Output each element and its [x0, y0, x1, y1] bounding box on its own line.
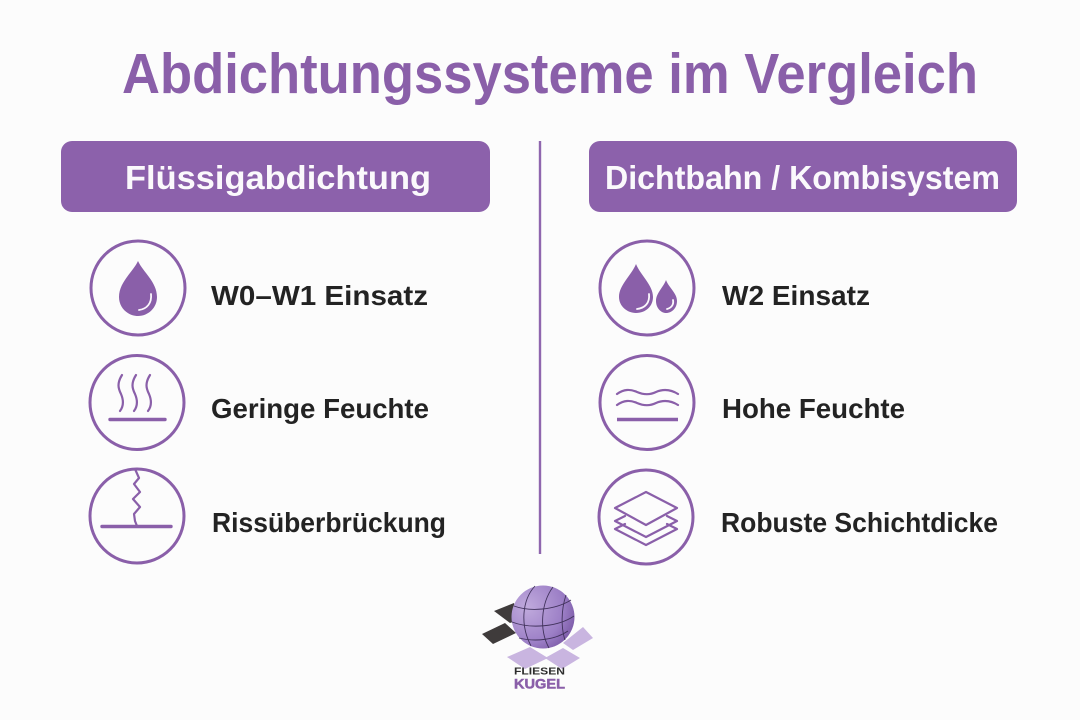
heading: Flüssigabdichtung — [61, 141, 490, 212]
icon: water drop — [91, 241, 185, 335]
heading: Dichtbahn / Kombisystem: Dichtbahn / Kombisystem — [605, 159, 1000, 196]
logo wordmark: FLIESEN — [514, 666, 565, 678]
panel: Flüssigabdichtung — [61, 141, 490, 563]
divider — [539, 141, 541, 554]
logo: Fliesen Kugel — [482, 586, 593, 692]
label: Hohe Feuchte: Hohe Feuchte — [722, 393, 905, 424]
heading: Dichtbahn / Kombisystem — [589, 141, 1017, 212]
title: Abdichtungssysteme im Vergleich — [122, 42, 978, 106]
label: Rissüberbrückung: Rissüberbrückung — [212, 507, 446, 538]
logo light tiles — [507, 627, 593, 669]
icon: two water drops — [600, 241, 694, 335]
icon: crack bridging — [90, 469, 184, 563]
logo dark tiles — [482, 603, 518, 644]
logo: Fliesen Kugel: KUGEL — [514, 676, 565, 692]
logo globe — [512, 586, 574, 648]
label: Robuste Schichtdicke: Robuste Schichtdicke — [721, 507, 998, 538]
icon: rising vapour — [90, 356, 184, 450]
icon: stacked layers — [599, 470, 693, 564]
panel: Dichtbahn / Kombisystem — [589, 141, 1017, 564]
label: Geringe Feuchte: Geringe Feuchte — [211, 393, 429, 424]
label: W2 Einsatz: W2 Einsatz — [722, 280, 870, 311]
label: W0–W1 Einsatz: W0–W1 Einsatz — [211, 280, 428, 311]
icon: waves above line — [600, 356, 694, 450]
heading: Flüssigabdichtung: Flüssigabdichtung — [125, 159, 431, 196]
